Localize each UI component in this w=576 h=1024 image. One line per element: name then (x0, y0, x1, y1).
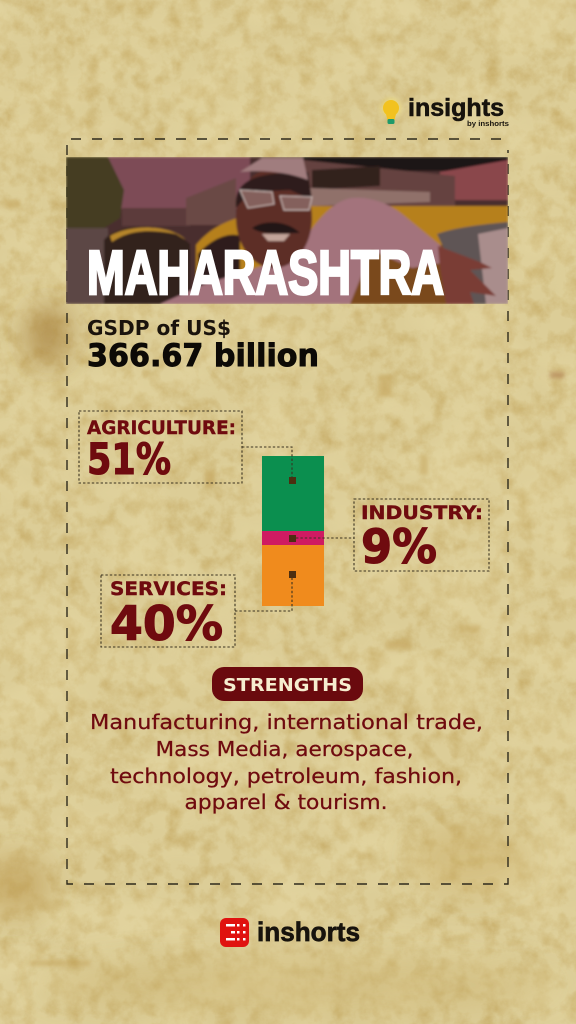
hand (438, 246, 496, 304)
strengths text: apparel & tourism. (184, 790, 388, 814)
roof rack (303, 160, 455, 208)
strengths text: Mass Media, aerospace, (156, 737, 414, 761)
trees (66, 157, 124, 228)
strengths pill: STRENGTHS (223, 675, 352, 696)
callout: agriculture (79, 411, 292, 485)
callout: services: 40% (110, 597, 223, 652)
logo: insights by inshorts (381, 94, 509, 128)
stacked bar chart (262, 456, 324, 606)
glasses (240, 190, 312, 210)
icon: inshorts square (220, 918, 249, 947)
moustache (252, 222, 300, 234)
head (236, 168, 312, 268)
cap (240, 158, 308, 180)
callout: agriculture: AGRICULTURE: (87, 417, 236, 439)
callout: agriculture: 51% (87, 435, 171, 485)
arm and shirt (160, 198, 448, 304)
GSDP text block: GSDP of US$ (87, 316, 231, 340)
strengths pill (212, 667, 363, 701)
GSDP text block: 366.67 billion (87, 338, 319, 374)
left buildings (122, 210, 186, 226)
callout: industry (296, 499, 489, 575)
callout: industry: 9% (361, 520, 437, 575)
callout: services: SERVICES: (110, 578, 227, 600)
logo: insights by inshorts: insights (408, 94, 504, 122)
strengths text (90, 710, 483, 814)
callout: services (101, 575, 292, 652)
title: MAHARASHTRA: MAHARASHTRA (87, 239, 444, 308)
sky (100, 157, 250, 209)
inshorts footer logo: inshorts (257, 917, 360, 947)
GSDP text block (87, 316, 319, 374)
left taxi and cars (66, 228, 108, 304)
dashed frame (67, 139, 508, 884)
taxi window (437, 222, 508, 304)
strengths text: technology, petroleum, fashion, (110, 764, 462, 788)
strengths text: Manufacturing, international trade, (90, 710, 483, 734)
callout: industry: INDUSTRY: (361, 502, 483, 524)
taxi lower body (350, 244, 446, 304)
icon: light bulb (381, 98, 401, 124)
logo: insights by inshorts: by inshorts (467, 119, 509, 128)
photo banner: man leaning on taxi (66, 157, 508, 304)
yellow taxi roof (194, 204, 508, 278)
